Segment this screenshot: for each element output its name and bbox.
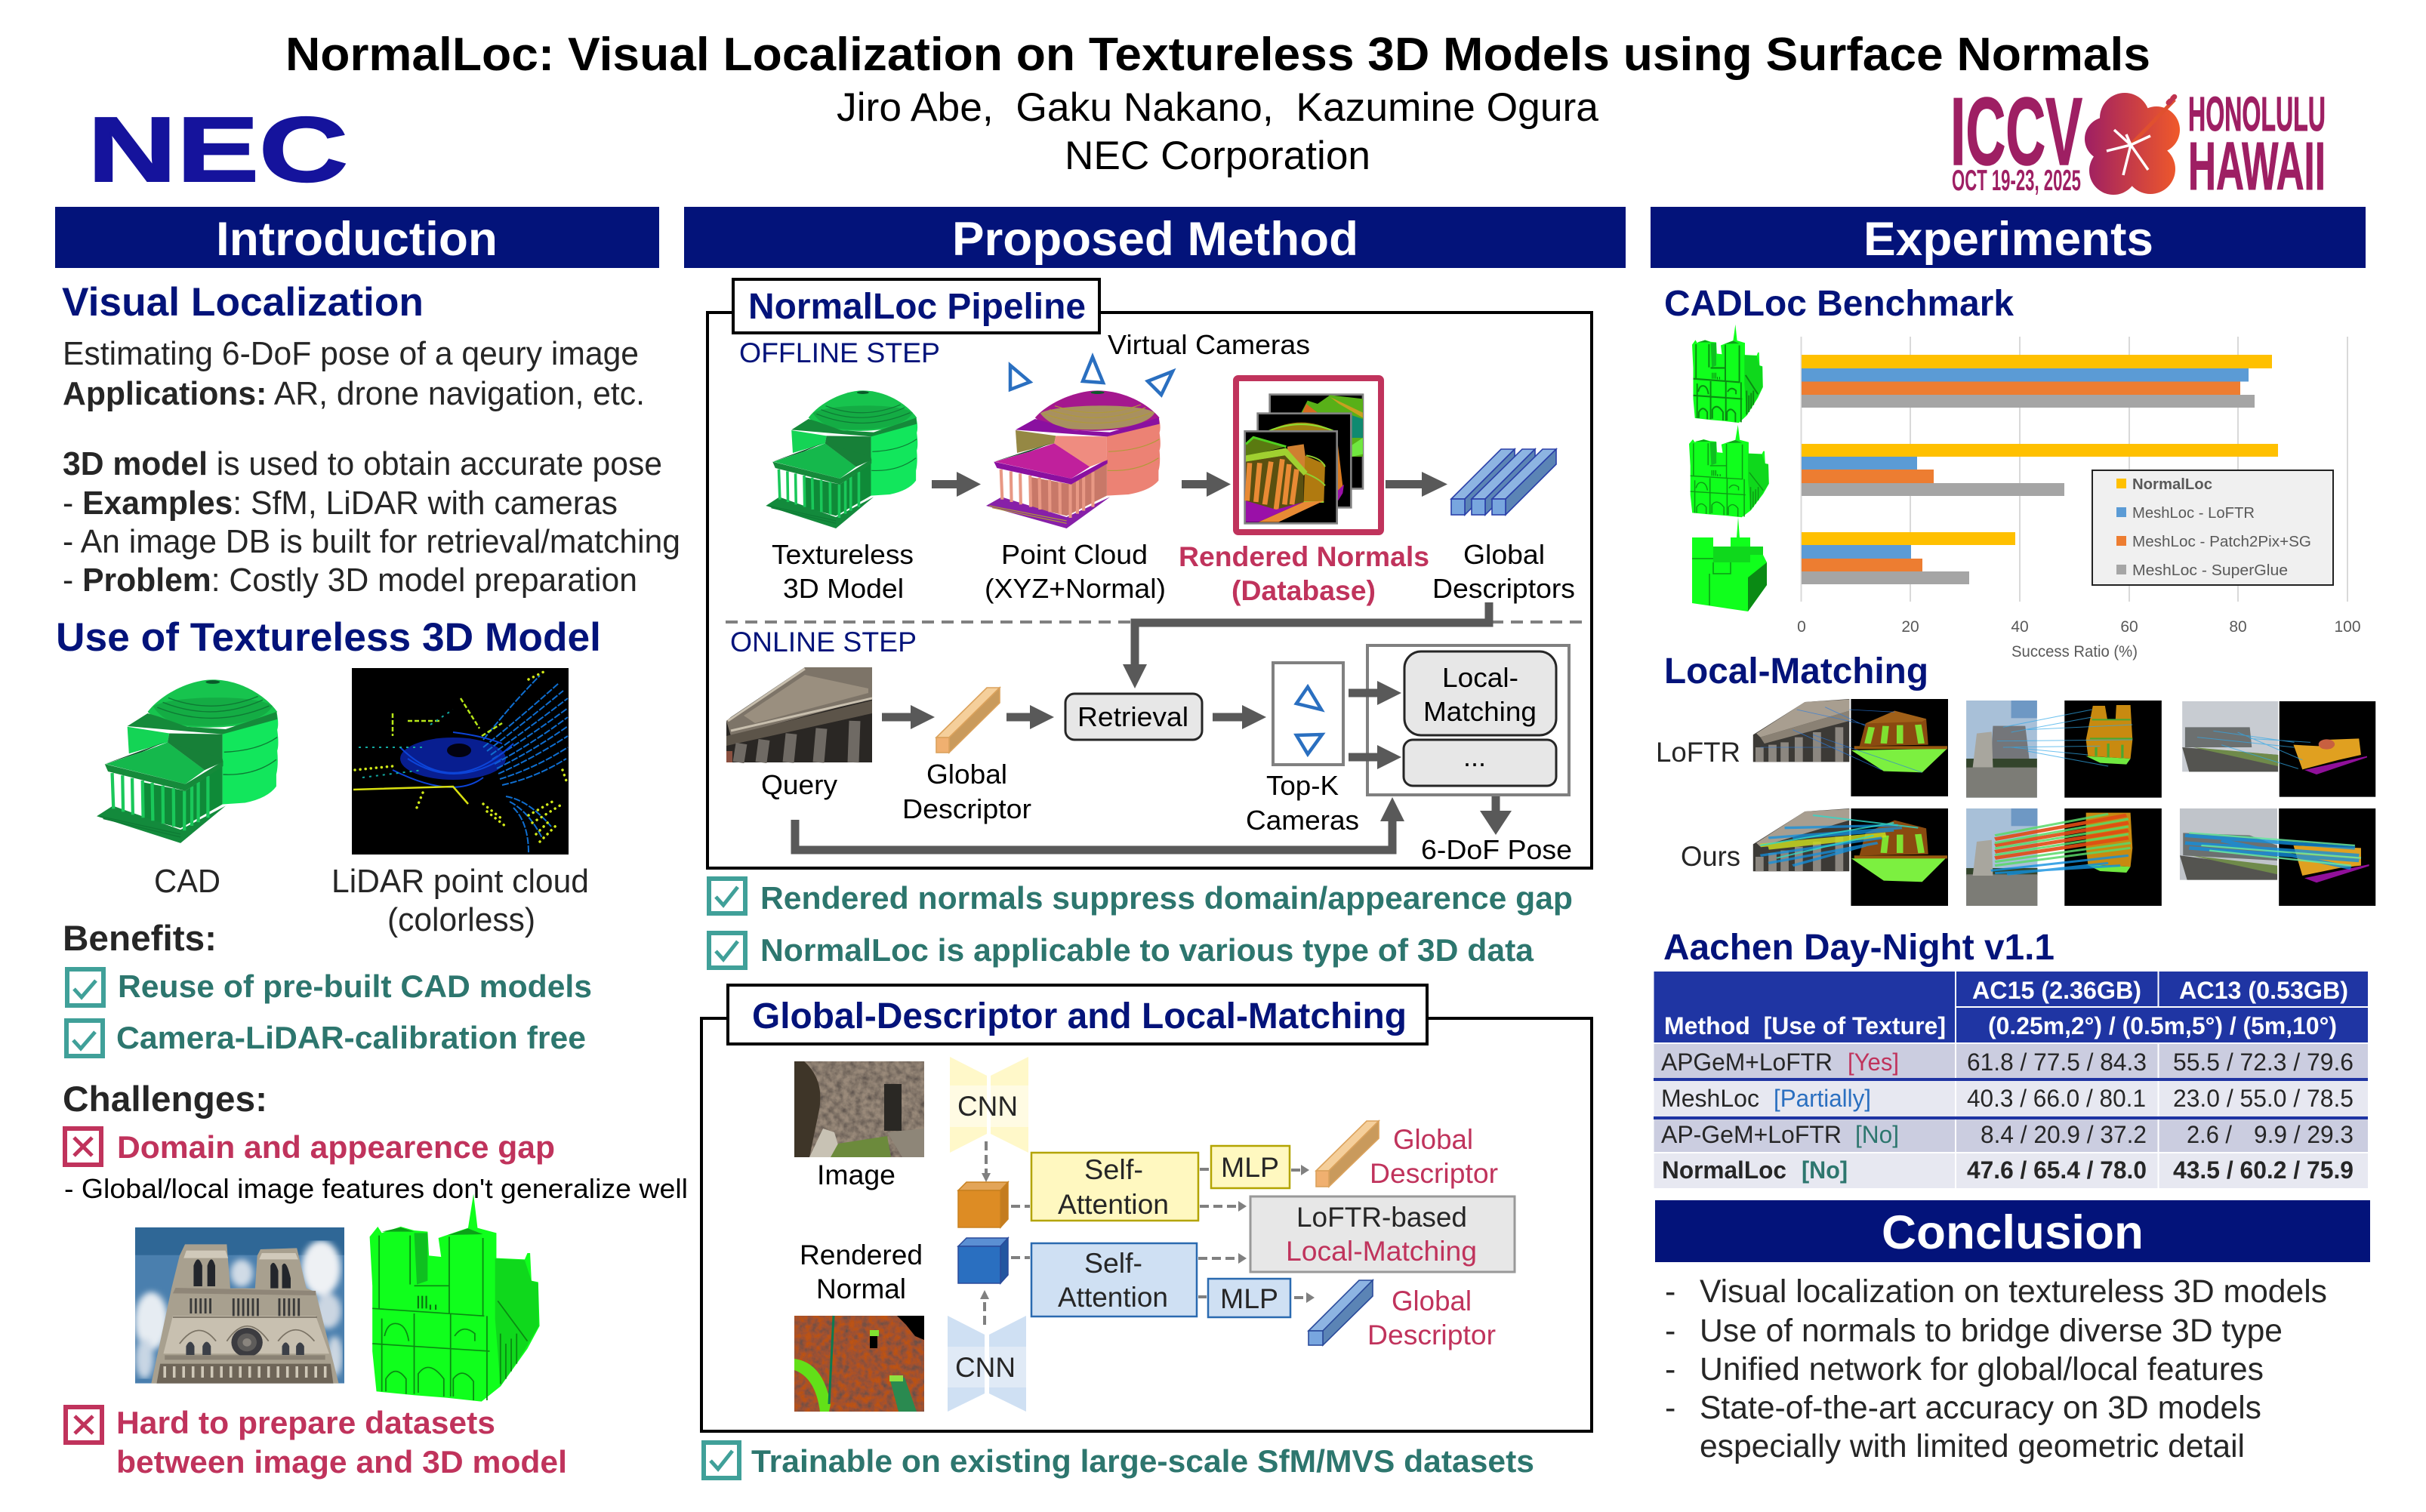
- row: APGeM+LoFTR: 61.8 / 77.5 / 84.3: [1967, 1049, 2147, 1076]
- result: rendered normals suppress gap: Rendered normals suppress domain/appearence gap: [760, 880, 1573, 916]
- result: trainable: Trainable on existing large-scale SfM/MVS datasets: [751, 1443, 1534, 1479]
- title: NormalLoc: Visual Localization on Textureless 3D Models using Surface Normals: [285, 29, 2150, 81]
- heading bar: Introduction: Introduction: [216, 213, 498, 266]
- image: model thumbnail mid detail: [1689, 425, 1769, 517]
- row: NormalLoc: NormalLoc: [1662, 1156, 1786, 1184]
- icon: query global descriptor: [936, 688, 1000, 753]
- challenge: hard to prepare datasets: [66, 1405, 567, 1480]
- caption: rendered normals: Rendered Normals: [1179, 541, 1429, 572]
- row: NormalLoc: 43.5 / 60.2 / 75.9: [2173, 1156, 2354, 1184]
- arrow: to pose: [1480, 796, 1512, 835]
- block: blue self-attention: Attention: [1058, 1282, 1168, 1313]
- panel: experiments: [1651, 207, 2375, 1188]
- bars: model 3: [1802, 532, 2015, 584]
- match: Notre Dame Ours: [1966, 808, 2162, 906]
- row: MeshLoc: 40.3 / 66.0 / 80.1: [1967, 1085, 2146, 1112]
- label: global descriptor red: [1370, 1124, 1498, 1189]
- row: MeshLoc: MeshLoc: [1661, 1085, 1759, 1112]
- block: blue self-attention: Self-: [1084, 1248, 1142, 1279]
- axis ticks: 100: [2334, 618, 2361, 636]
- panel: global descriptor and local matching: [701, 985, 1592, 1431]
- row: AP-GeM+LoFTR: 9.9 / 29.3: [2254, 1121, 2354, 1148]
- block: yellow self-attention: Attention: [1058, 1189, 1169, 1220]
- axis ticks: 20: [1901, 618, 1919, 636]
- logo: ICCV Honolulu Hawaii: [1950, 78, 2326, 205]
- logo: ICCV Honolulu Hawaii: HAWAII: [2188, 129, 2326, 205]
- label: global descriptor red lower: Global: [1392, 1286, 1472, 1316]
- heading bar: Conclusion: Conclusion: [1882, 1206, 2144, 1259]
- label: online step: ONLINE STEP: [730, 627, 917, 657]
- image: model thumbnail low detail: [1692, 517, 1767, 611]
- legend: MeshLoc - LoFTR: [2132, 505, 2255, 522]
- image: Notre Dame photo: [135, 1227, 344, 1384]
- conclusion bullet list: Use of normals to bridge diverse 3D type: [1700, 1313, 2283, 1349]
- row: MeshLoc: [Partially]: [1774, 1085, 1871, 1112]
- arrow: attention to matching: [1200, 1201, 1247, 1212]
- label: global descriptor red: Global: [1393, 1124, 1473, 1155]
- caption: CAD: CAD: [154, 863, 220, 900]
- challenge: hard to prepare datasets: Hard to prepare datasets: [116, 1405, 495, 1440]
- icon: orange feature cube: [958, 1182, 1008, 1227]
- image: LiDAR point cloud: [352, 668, 569, 855]
- row: NormalLoc: 47.6 / 65.4 / 78.0: [1967, 1156, 2147, 1184]
- arrow: blue branch: [1198, 1292, 1315, 1303]
- arrow: blue attention to matching: [1198, 1253, 1247, 1264]
- challenge: domain gap: Domain and appearence gap: [117, 1129, 555, 1165]
- caption: point cloud: Point Cloud: [1001, 539, 1148, 570]
- arrow: top-k to matching: [1349, 681, 1401, 705]
- arrow: query to descriptor: [882, 705, 935, 729]
- label: Ours row: Ours: [1681, 841, 1740, 872]
- heading bar: Introduction: [55, 207, 659, 268]
- caption: 6-DoF pose: 6-DoF Pose: [1421, 834, 1572, 865]
- arrow: point cloud to rendered normals: [1182, 472, 1231, 497]
- caption: rendered normals: (Database): [1231, 575, 1376, 606]
- caption: top-k cameras: Top-K: [1266, 770, 1339, 801]
- block: blue MLP: [1208, 1279, 1290, 1317]
- conclusion bullet list: especially with limited geometric detail: [1700, 1428, 2245, 1464]
- text block: definition: Estimating 6-DoF pose of a qeury image: [63, 335, 639, 372]
- arrow: top-k to other: [1349, 745, 1401, 769]
- caption: LiDAR point cloud: [331, 863, 589, 938]
- arrow: yellow branch: [1200, 1165, 1309, 1175]
- arrow: descriptors to retrieval: [1123, 602, 1489, 688]
- row: APGeM+LoFTR: [Yes]: [1848, 1049, 1899, 1076]
- row: AP-GeM+LoFTR: 2.6 /: [2187, 1121, 2232, 1148]
- caption: textureless 3D model: [772, 539, 914, 604]
- icon: blue feature cube: [958, 1238, 1008, 1283]
- caption: rendered normal: Rendered: [800, 1239, 923, 1270]
- box: retrieval: [1065, 694, 1202, 740]
- subheading: Local-Matching: Local-Matching: [1664, 651, 1928, 691]
- heading bar: Experiments: Experiments: [1863, 213, 2153, 266]
- conclusion bullet list: -: [1665, 1390, 1675, 1426]
- panel: introduction: [55, 207, 688, 1480]
- block: yellow self-attention: [1031, 1153, 1198, 1221]
- match: Notre Dame LoFTR: [1966, 701, 2162, 798]
- caption: point cloud: (XYZ+Normal): [985, 573, 1166, 604]
- icon: blue global descriptor: [1309, 1280, 1373, 1345]
- table header: Method [Use of Texture]: [1664, 1012, 1946, 1039]
- arrow: image CNN to feature: [982, 1141, 991, 1182]
- arrow: model to point cloud: [932, 472, 981, 497]
- axis ticks: [1797, 618, 2361, 636]
- challenge: hard to prepare datasets: between image and 3D model: [116, 1444, 567, 1480]
- logo: ICCV Honolulu Hawaii: OCT 19-23, 2025: [1952, 165, 2081, 197]
- subheading: Aachen Day-Night: Aachen Day-Night v1.1: [1663, 928, 2055, 968]
- subheading: Visual Localization: Visual Localization: [62, 280, 424, 325]
- other matcher: ...: [1463, 741, 1486, 772]
- text block: definition: Applications: AR, drone navigation, etc.: [63, 375, 645, 412]
- other matcher: [1404, 740, 1556, 786]
- row: AP-GeM+LoFTR: AP-GeM+LoFTR: [1661, 1121, 1842, 1148]
- text block: 3D model: - An image DB is built for retrieval/matching: [63, 523, 680, 560]
- legend: MeshLoc - SuperGlue: [2132, 562, 2288, 579]
- rendered normals database: [1236, 378, 1381, 532]
- panel title: Global-Descriptor and Local-Matching: [752, 996, 1407, 1036]
- conclusion bullet list: Visual localization on textureless 3D models: [1700, 1273, 2327, 1310]
- block: LoFTR-based local matching: LoFTR-based: [1296, 1202, 1467, 1233]
- bar chart: success ratio: [1797, 337, 2361, 661]
- caption: point cloud: [985, 539, 1166, 604]
- benefit: reuse of CAD models: Reuse of pre-built CAD models: [118, 968, 592, 1004]
- caption: query: Query: [761, 769, 837, 800]
- legend: [2092, 470, 2333, 585]
- text block: 3D model: - Examples: SfM, LiDAR with cameras: [63, 485, 618, 522]
- caption: global descriptors: [1432, 539, 1575, 604]
- row: APGeM+LoFTR: 55.5 / 72.3 / 79.6: [2173, 1049, 2354, 1076]
- conclusion bullet list: -: [1665, 1273, 1675, 1310]
- table header: AC15 (2.36GB): [1972, 977, 2141, 1004]
- bars: model 1: [1802, 355, 2272, 408]
- pipeline title: [733, 279, 1099, 333]
- benefit: calibration free: Camera-LiDAR-calibration free: [116, 1020, 586, 1055]
- row: NormalLoc: [No]: [1802, 1156, 1848, 1184]
- image: CAD Pantheon: [97, 679, 278, 843]
- box: top-k cameras: [1273, 663, 1343, 765]
- arrow: retrieval to top-k: [1213, 705, 1266, 729]
- arrow: query to matching: [795, 797, 1404, 850]
- block: CNN normal encoder: [948, 1316, 1026, 1412]
- caption: image: Image: [817, 1159, 895, 1190]
- block: CNN normal encoder: CNN: [955, 1352, 1016, 1383]
- conclusion bullet list: -: [1665, 1351, 1675, 1387]
- axis title: Success Ratio (%): [2011, 643, 2138, 661]
- heading bar: Experiments: [1651, 207, 2366, 268]
- caption: global descriptors: Global: [1463, 539, 1545, 570]
- caption: LiDAR point cloud: LiDAR point cloud: [331, 863, 589, 900]
- row: AP-GeM+LoFTR: 8.4 / 20.9 / 37.2: [1981, 1121, 2147, 1148]
- panel title: [728, 985, 1427, 1044]
- image: query photo: [726, 667, 872, 762]
- block: CNN image encoder: [950, 1057, 1028, 1153]
- match: Reichstag Ours: [2180, 808, 2375, 906]
- conclusion bullet list: -: [1665, 1313, 1675, 1349]
- caption: rendered normal: [800, 1239, 923, 1304]
- caption: top-k cameras: Cameras: [1246, 805, 1359, 836]
- image: Notre Dame textureless model: [370, 1194, 540, 1402]
- local matching: [1404, 651, 1556, 735]
- heading: Challenges: Challenges:: [63, 1079, 267, 1119]
- row: AP-GeM+LoFTR: [1661, 1121, 2354, 1148]
- result: applicable to various 3D data: NormalLoc is applicable to various type of 3D data: [760, 932, 1534, 968]
- logo: NEC: NEC: [88, 98, 348, 201]
- row: MeshLoc: [1661, 1085, 2354, 1112]
- figure: local matching comparison: [1753, 699, 2375, 906]
- logo: ICCV Honolulu Hawaii: ICCV: [1950, 78, 2082, 185]
- box: retrieval: Retrieval: [1077, 701, 1188, 732]
- subheading: CADLoc Benchmark: CADLoc Benchmark: [1664, 284, 2014, 324]
- authors: Jiro Abe, Gaku Nakano, Kazumine Ogura: [837, 85, 1599, 130]
- icon: hibiscus flower: [2085, 93, 2180, 195]
- conclusion bullet list: State-of-the-art accuracy on 3D models: [1700, 1390, 2261, 1426]
- match: Pantheon LoFTR: [1753, 699, 1948, 796]
- row: APGeM+LoFTR: [1661, 1049, 2354, 1076]
- caption: rendered normals: [1179, 541, 1429, 606]
- table: Aachen results: [1654, 972, 2368, 1188]
- axis ticks: 40: [2011, 618, 2029, 636]
- caption: global descriptors: Descriptors: [1432, 573, 1575, 604]
- row: AP-GeM+LoFTR: [No]: [1855, 1121, 1899, 1148]
- local matching: Local-: [1442, 662, 1518, 693]
- image: model thumbnail high detail: [1692, 325, 1763, 423]
- dashes: feature to attention: [1011, 1206, 1030, 1258]
- subheading: Use of Textureless 3D Model: Use of Textureless 3D Model: [56, 615, 601, 660]
- match: Reichstag LoFTR: [2182, 701, 2375, 797]
- pipeline title: NormalLoc Pipeline: [748, 287, 1086, 327]
- block: LoFTR-based local matching: Local-Matching: [1286, 1236, 1477, 1267]
- image: stone wall photo: [794, 1061, 924, 1157]
- caption: global descriptor: Descriptor: [902, 793, 1031, 824]
- heading bar: Proposed Method: [684, 207, 1626, 268]
- caption: rendered normal: Normal: [816, 1273, 906, 1304]
- heading bar: Conclusion: [1655, 1200, 2370, 1262]
- heading bar: Proposed Method: Proposed Method: [952, 213, 1358, 266]
- label: global descriptor red lower: Descriptor: [1367, 1320, 1496, 1350]
- block: yellow self-attention: Self-: [1084, 1154, 1143, 1185]
- arrow: rendered normals to descriptors: [1386, 472, 1447, 497]
- icon: global descriptors: [1451, 449, 1556, 515]
- panel: pipeline: [707, 279, 1592, 868]
- label: global descriptor red: Descriptor: [1370, 1158, 1498, 1189]
- block: yellow MLP: [1211, 1146, 1290, 1188]
- conclusion bullet list: [1665, 1273, 2327, 1464]
- conclusion bullet list: Unified network for global/local features: [1700, 1351, 2264, 1387]
- affiliation: NEC Corporation: [1065, 134, 1370, 178]
- icon: orange global descriptor: [1316, 1121, 1379, 1187]
- caption: global descriptor: [902, 759, 1031, 824]
- row: APGeM+LoFTR: APGeM+LoFTR: [1661, 1049, 1833, 1076]
- block: LoFTR-based local matching: [1250, 1196, 1515, 1272]
- table header: [1664, 977, 2348, 1039]
- label: global descriptor red lower: [1367, 1286, 1496, 1350]
- image: rendered normal of wall: [794, 1316, 924, 1412]
- box: local matching group: [1367, 645, 1569, 795]
- caption: LiDAR point cloud: (colorless): [387, 901, 535, 938]
- bars: model 2: [1802, 444, 2278, 496]
- panel: proposed method: [684, 207, 1626, 1479]
- text block: definition: [63, 335, 645, 412]
- match: Pantheon Ours: [1753, 808, 1948, 906]
- image: textureless 3D model: [766, 390, 917, 528]
- arrow: normal CNN to feature: [980, 1290, 989, 1325]
- row: MeshLoc: 23.0 / 55.0 / 78.5: [2173, 1085, 2354, 1112]
- icon: camera triangles: [1010, 357, 1173, 395]
- table header: AC13 (0.53GB): [2179, 977, 2348, 1004]
- legend: MeshLoc - Patch2Pix+SG: [2132, 534, 2311, 550]
- label: LoFTR row: LoFTR: [1656, 737, 1740, 768]
- heading: Benefits: Benefits:: [63, 918, 217, 958]
- text block: 3D model: - Problem: Costly 3D model preparation: [63, 562, 637, 599]
- block: blue self-attention: [1031, 1243, 1197, 1316]
- caption: global descriptor: Global: [926, 759, 1007, 790]
- image: point cloud model: [986, 390, 1161, 528]
- text block: 3D model: 3D model is used to obtain accurate pose: [63, 445, 662, 482]
- panel: conclusion: [1655, 1200, 2370, 1464]
- block: blue MLP: MLP: [1220, 1283, 1278, 1314]
- text block: 3D model: [63, 445, 680, 599]
- legend: NormalLoc: [2132, 476, 2212, 493]
- axis ticks: 80: [2229, 618, 2247, 636]
- axis ticks: 60: [2120, 618, 2138, 636]
- caption: top-k cameras: [1246, 770, 1359, 836]
- note: features: - Global/local image features don't generalize well: [64, 1173, 688, 1204]
- row: NormalLoc: [1662, 1156, 2354, 1184]
- block: yellow MLP: MLP: [1221, 1152, 1279, 1183]
- arrow: descriptor to retrieval: [1006, 705, 1054, 729]
- label: offline step: OFFLINE STEP: [739, 337, 940, 368]
- axis ticks: 0: [1797, 618, 1806, 636]
- label: virtual cameras: Virtual Cameras: [1108, 329, 1310, 360]
- table header: (0.25m,2°) / (0.5m,5°) / (5m,10°): [1988, 1012, 2337, 1039]
- local matching: Matching: [1423, 696, 1537, 727]
- caption: textureless 3D model: 3D Model: [783, 573, 904, 604]
- caption: textureless 3D model: Textureless: [772, 539, 914, 570]
- block: CNN image encoder: CNN: [957, 1091, 1018, 1122]
